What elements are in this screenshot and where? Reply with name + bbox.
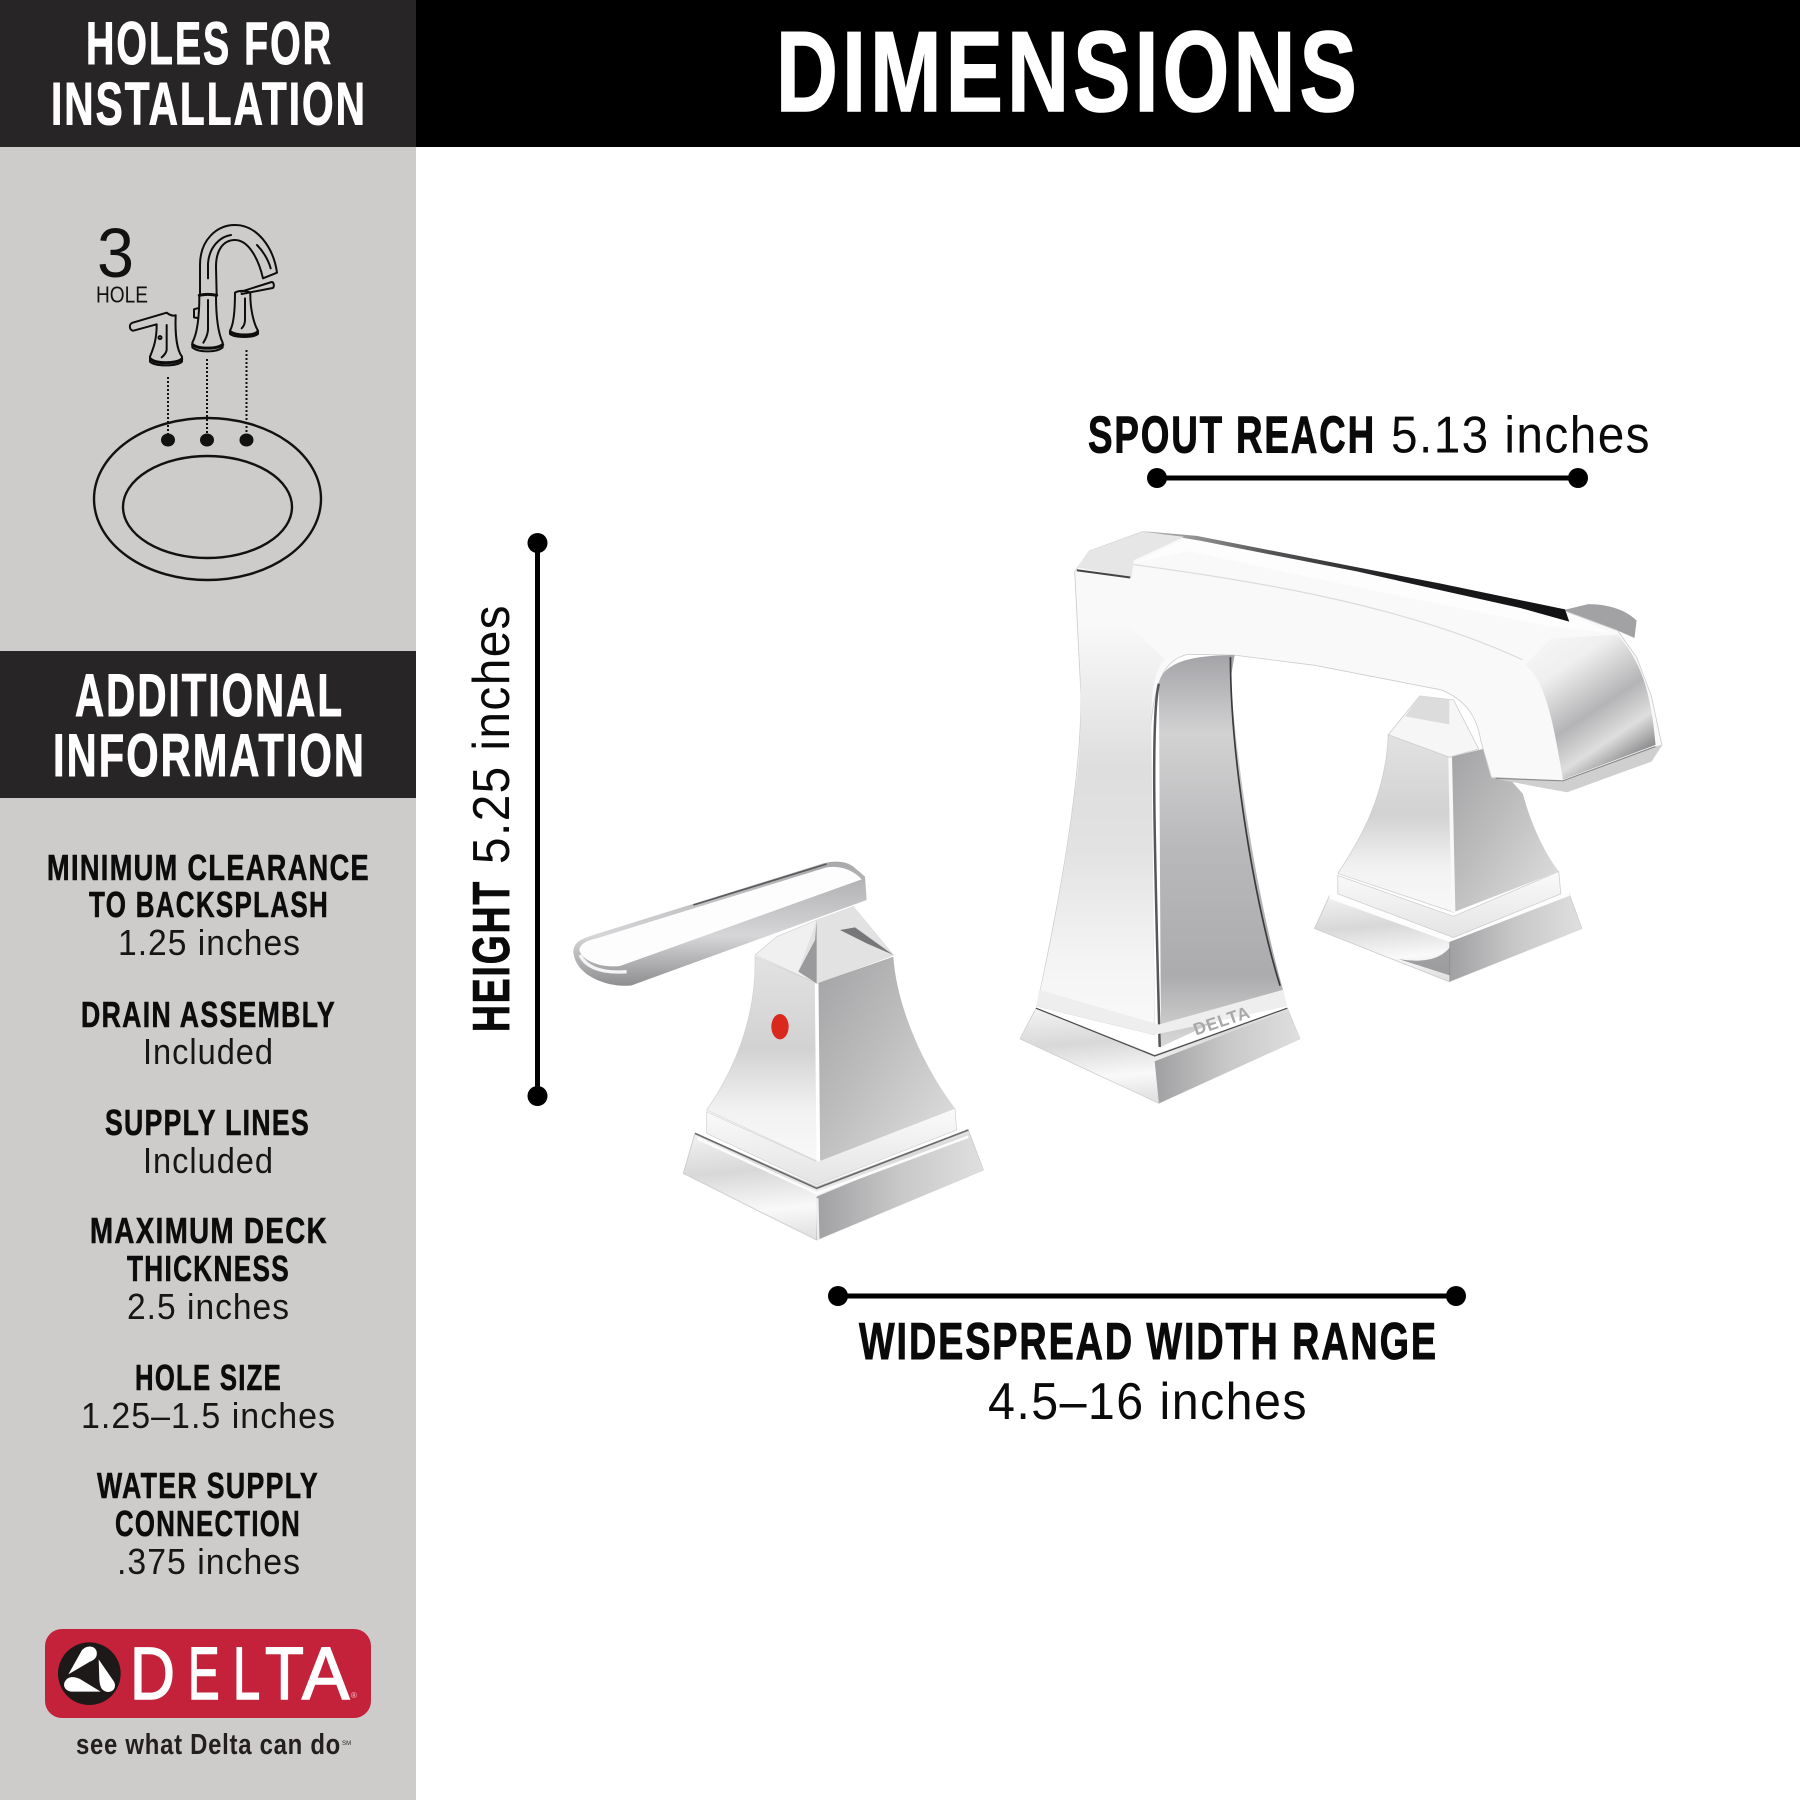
title bar: dimensions: DIMENSIONS (776, 9, 1361, 136)
spec: water supply connection: CONNECTION (115, 1503, 301, 1544)
spout top highlight band (1134, 537, 1609, 633)
logo: delta: ® (351, 1691, 357, 1700)
handle body right face (817, 957, 955, 1162)
spec: maximum deck thickness: THICKNESS (127, 1248, 290, 1289)
handle band (707, 1108, 957, 1185)
spec: maximum deck thickness: MAXIMUM DECK (90, 1210, 328, 1251)
dimension: widespread width range: 4.5–16 inches (988, 1373, 1308, 1431)
spout body (1020, 531, 1662, 1103)
spec: maximum deck thickness (90, 1210, 328, 1327)
spec: minimum clearance to backsplash (47, 847, 370, 963)
number: 3 hole (96, 214, 148, 308)
spec: minimum clearance to backsplash: TO BACKSPLASH (89, 884, 329, 925)
logo: delta: L (233, 1633, 260, 1716)
spec: water supply connection: WATER SUPPLY (97, 1465, 319, 1506)
right handle (1315, 696, 1582, 982)
product: left hot water handle (573, 862, 983, 1240)
heading: holes for installation (0, 0, 416, 147)
tagline: see what delta can do: SM (342, 1741, 351, 1747)
spec: drain assembly: Included (143, 1031, 274, 1072)
dimension: widespread width range: WIDESPREAD WIDTH RANGE (859, 1313, 1438, 1371)
spec: hole size (81, 1357, 336, 1436)
spout base (1020, 1008, 1300, 1103)
heading: additional information (0, 651, 416, 798)
heading: holes for installation: HOLES FOR (86, 10, 333, 77)
dimension: spout reach: 5.13 inches (1391, 406, 1651, 464)
logo engraving: DELTA (1191, 1002, 1253, 1039)
spec: maximum deck thickness: 2.5 inches (127, 1286, 290, 1327)
spec: hole size: 1.25–1.5 inches (81, 1395, 336, 1436)
heading: holes for installation: INSTALLATION (51, 70, 367, 138)
panel: three hole installation diagram (94, 214, 321, 580)
spec: minimum clearance to backsplash: MINIMUM CLEARANCE (47, 847, 370, 888)
red hot indicator (771, 1014, 789, 1039)
logo: delta: E (188, 1633, 220, 1716)
stopper (1563, 604, 1637, 638)
logo: delta: T (265, 1633, 304, 1715)
spec: supply lines (105, 1102, 310, 1181)
dimension: spout reach (1088, 406, 1651, 488)
lever (573, 862, 867, 986)
dimension: height (463, 533, 548, 1106)
handle neck (755, 907, 893, 983)
number: 3 hole: HOLE (96, 282, 148, 308)
heading: additional information: ADDITIONAL (75, 662, 344, 729)
spec: water supply connection (97, 1465, 319, 1582)
title bar: dimensions (416, 0, 1800, 147)
spout left column shading (1037, 622, 1165, 1035)
icon: faucet line drawing (130, 225, 277, 365)
icon: delta triangle mark (58, 1642, 121, 1705)
dimension: height: HEIGHT (463, 880, 521, 1032)
logo: delta: A (302, 1633, 350, 1715)
spec: supply lines: SUPPLY LINES (105, 1102, 310, 1143)
spout inner face (1159, 655, 1283, 1047)
handle base (683, 1130, 983, 1240)
icon: sink basin with holes (94, 350, 321, 580)
spec: supply lines: Included (143, 1140, 274, 1181)
spec: drain assembly (81, 994, 336, 1072)
logo: delta (45, 1629, 371, 1718)
number: 3 hole: 3 (97, 214, 134, 292)
panel: left sidebar background (0, 0, 416, 1800)
spec: drain assembly: DRAIN ASSEMBLY (81, 994, 336, 1035)
heading: additional information: INFORMATION (53, 722, 366, 789)
handle body left face (707, 957, 818, 1162)
spec: hole size: HOLE SIZE (135, 1357, 282, 1398)
spec: water supply connection: .375 inches (117, 1541, 301, 1582)
spec: minimum clearance to backsplash: 1.25 inches (118, 922, 301, 963)
product: faucet spout and right handle (1020, 531, 1662, 1103)
tagline: see what delta can do: see what Delta can do (76, 1729, 341, 1761)
logo: delta: D (130, 1633, 175, 1715)
dimension: height: 5.25 inches (463, 604, 521, 864)
spout end (1525, 635, 1656, 780)
dimension: widespread width range (828, 1286, 1466, 1431)
dimension: spout reach: SPOUT REACH (1088, 406, 1376, 464)
